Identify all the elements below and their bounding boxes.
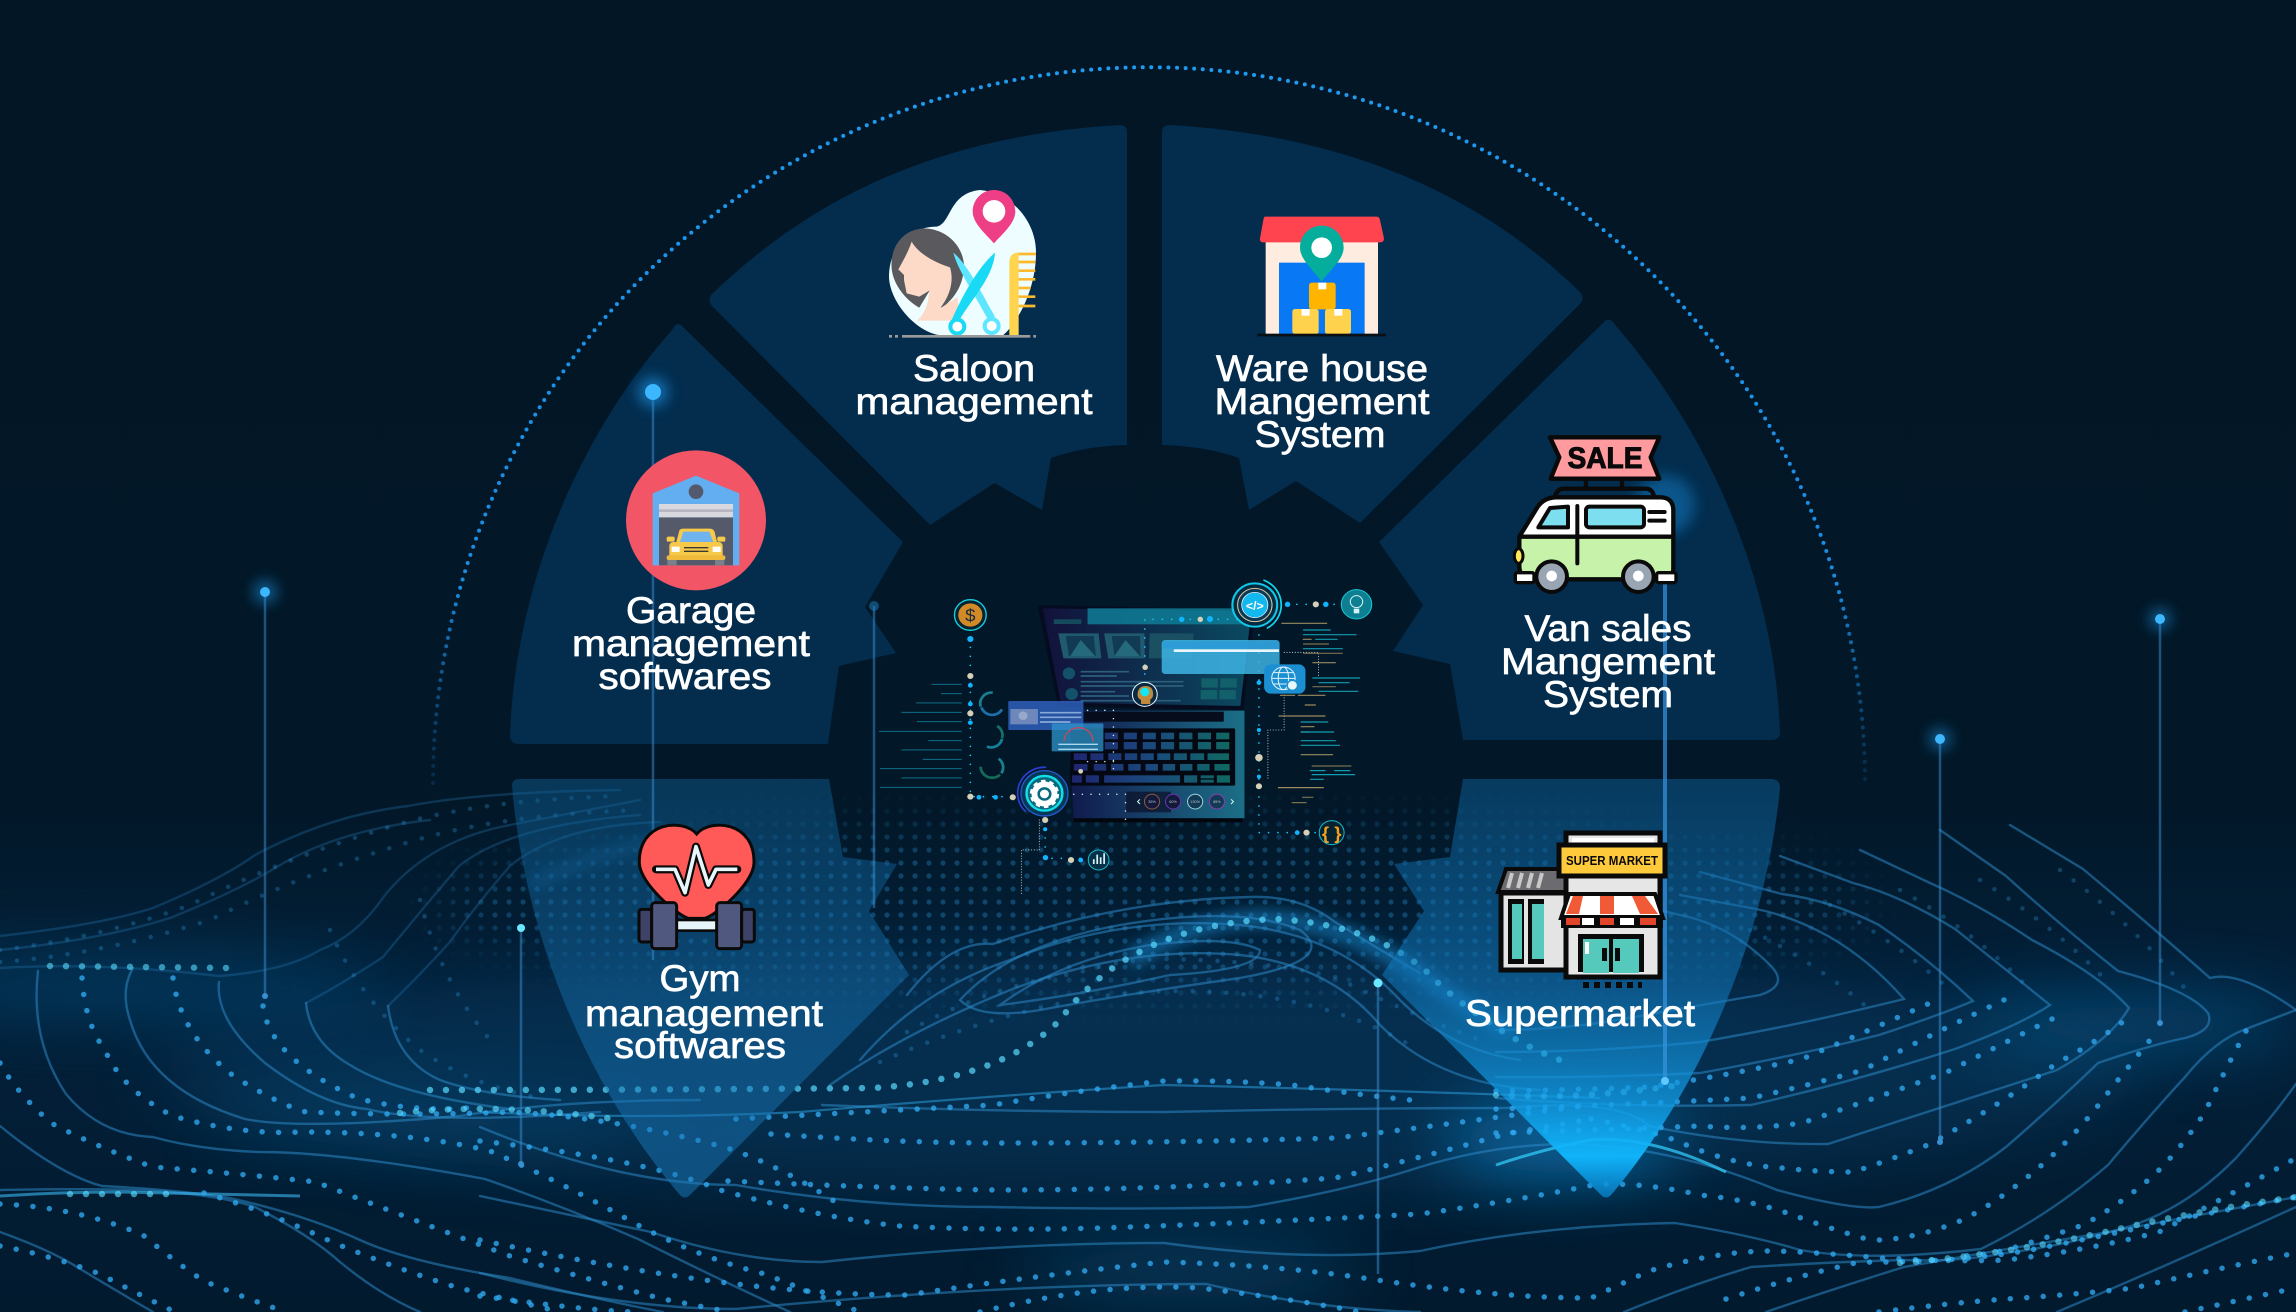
label: saloon management: Saloon (913, 348, 1035, 389)
icon: supermarket: SUPER MARKET (1566, 854, 1658, 868)
label: gym management: management (585, 993, 824, 1034)
icon: hair salon (889, 190, 1036, 338)
label: van sales management: Van sales (1524, 608, 1692, 649)
badge: code target (1232, 580, 1281, 628)
label: van sales management: System (1543, 674, 1673, 715)
icon: van with sale sign: SALE (1567, 442, 1642, 475)
badge: dollar (954, 600, 986, 630)
label: warehouse management: System (1254, 414, 1386, 455)
badge: code target: </> (1246, 599, 1264, 613)
label: van sales management (1501, 608, 1716, 715)
left code lines (879, 684, 962, 787)
vertical glowing pins (253, 377, 2171, 1274)
badge: brackets (1319, 821, 1344, 845)
panel: supermarket (1382, 779, 1780, 1198)
panel: garage management (510, 324, 903, 744)
icon: heart and dumbbell (639, 825, 754, 949)
label: van sales management: Mangement (1501, 641, 1716, 682)
laptop dials: 35% (1148, 800, 1157, 804)
label: warehouse management (1214, 348, 1430, 455)
icon: supermarket (1498, 833, 1665, 985)
icon: garage (626, 450, 766, 590)
icon: van with sale sign (1514, 437, 1676, 592)
laptop dials: 60% (1169, 800, 1178, 804)
laptop dials (1126, 792, 1233, 812)
connector dots (967, 601, 1343, 895)
laptop screen (1038, 605, 1255, 710)
progress arcs (980, 693, 1003, 778)
badge: gear (1018, 767, 1068, 816)
badge: light bulb (1341, 590, 1372, 619)
laptop dials: 85% (1213, 800, 1221, 804)
floating windows (1008, 640, 1305, 751)
label: garage management (572, 590, 811, 697)
label: gym management: Gym (660, 958, 740, 999)
gear wheel with six sector panels (510, 125, 1780, 1198)
label: saloon management (856, 348, 1093, 422)
laptop dials: 130% (1190, 800, 1201, 804)
icon: warehouse (1257, 217, 1386, 336)
label: garage management: Garage (626, 590, 756, 631)
label: gym management: softwares (614, 1025, 786, 1066)
panel: gym management (512, 779, 909, 1198)
label: warehouse management: Ware house (1216, 348, 1428, 389)
dotted semicircle arc (433, 67, 1865, 783)
label: supermarket: Supermarket (1465, 993, 1696, 1034)
label: garage management: softwares (598, 656, 772, 697)
laptop base and keyboard (1067, 711, 1244, 818)
badge: brackets: { } (1322, 823, 1342, 843)
panel: warehouse management (1162, 125, 1582, 523)
panel: van sales management (1379, 320, 1780, 740)
central laptop illustration (879, 580, 1372, 895)
label: warehouse management: Mangement (1214, 381, 1430, 422)
background with glowing wave field (0, 788, 2296, 1312)
badge: chart (1088, 850, 1109, 870)
label: gym management (585, 958, 824, 1066)
badge: head with gear (1132, 682, 1157, 706)
label: saloon management: management (856, 381, 1093, 422)
panel: saloon management (710, 125, 1127, 525)
right code lines (1278, 623, 1360, 803)
badge: dollar: $ (965, 605, 976, 626)
label: garage management: management (572, 623, 811, 664)
